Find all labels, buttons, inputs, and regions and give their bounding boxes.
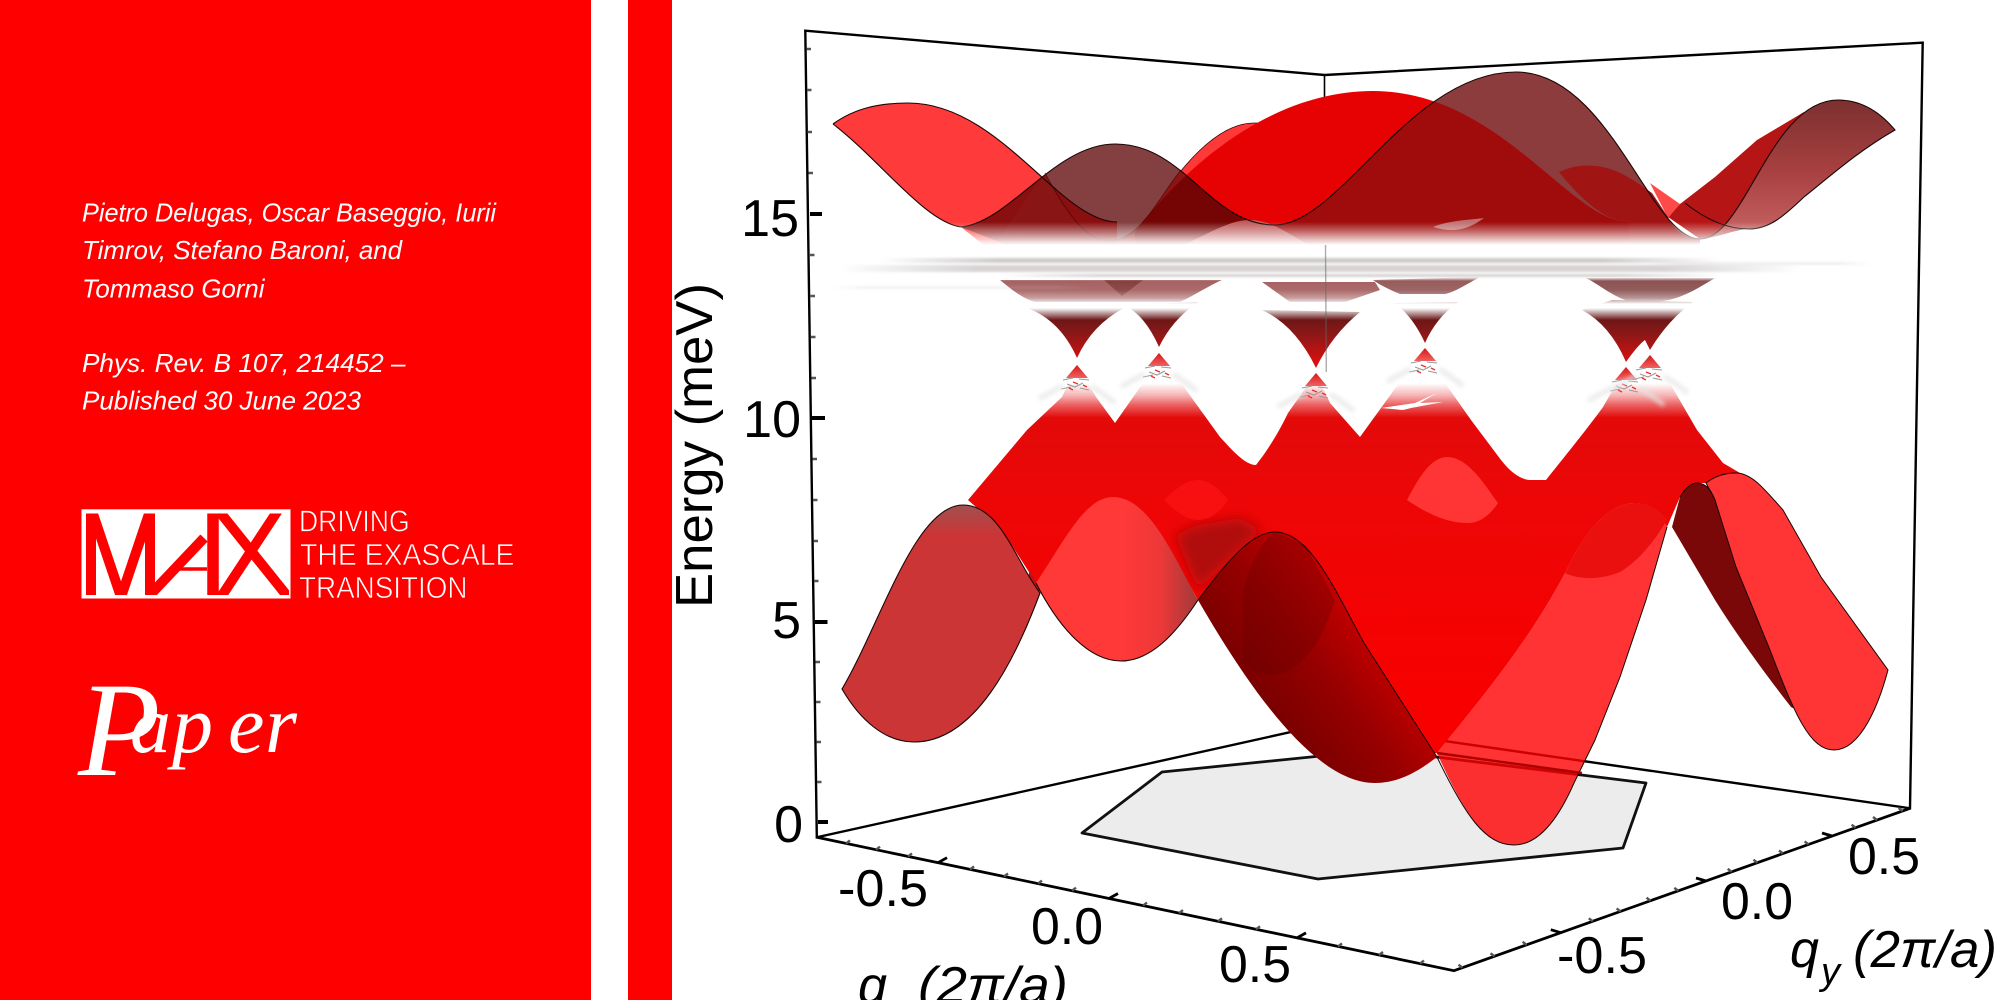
qy axis title: q [1790, 921, 1819, 979]
qy tick labels: 0.5 [1848, 828, 1920, 886]
text block: journal reference: Published 30 June 2023 [82, 386, 362, 416]
right arm dark fold [1672, 483, 1800, 712]
qy tick labels [1557, 828, 1920, 985]
qx tick labels [838, 860, 1291, 994]
y axis labels: 0 [774, 796, 803, 854]
qx tick labels: 0.0 [1031, 898, 1103, 956]
qy axis title: (2π/a) [1853, 921, 1997, 979]
qx axis ticks [846, 840, 1424, 964]
floor: Brillouin zone hexagon [1082, 750, 1646, 879]
main red body of lower band [968, 348, 1740, 760]
shaded fold [1175, 518, 1262, 590]
logo: MAX [82, 509, 290, 598]
text block: authors: Tommaso Gorni [82, 274, 266, 304]
front axes [817, 808, 1910, 971]
thin floor line seen through front sheet [1437, 753, 1582, 773]
chart: 3D magnon band structure [666, 31, 1997, 1000]
qy axis ticks [1458, 808, 1903, 968]
dark central lobe [1198, 532, 1437, 783]
white fade overlay between bands [830, 215, 1890, 325]
cone apex marks on lower band [1039, 348, 1688, 411]
y axis labels: 10 [743, 391, 801, 449]
lower magnon band surface [842, 348, 1888, 845]
mid-gap sheets [1000, 277, 1715, 302]
gray flat-band streaks [830, 258, 1870, 289]
text block: authors: Timrov, Stefano Baroni, and [82, 235, 404, 265]
qy tick labels: 0.0 [1721, 873, 1793, 931]
left brown lobe [842, 505, 1040, 742]
logo tagline: DRIVING [299, 504, 410, 539]
logo tagline: THE EXASCALE [300, 537, 514, 572]
lower band fade overlay [830, 345, 1890, 420]
interior lobes [1164, 457, 1498, 523]
y axis labels [741, 190, 803, 854]
lower band outlines [1198, 483, 1715, 845]
white glitch shards on lower band [1381, 393, 1443, 410]
logo tagline: TRANSITION [299, 570, 468, 605]
qx tick labels: -0.5 [838, 860, 928, 918]
text block: journal reference [82, 348, 406, 416]
right arm bright sheet [1706, 473, 1888, 750]
qx tick labels: 0.5 [1219, 936, 1291, 994]
energy axis ticks [806, 49, 828, 822]
qy tick labels: -0.5 [1557, 927, 1647, 985]
y axis labels: 15 [741, 190, 799, 248]
y axis labels: 5 [772, 592, 801, 650]
heading: Paper script: aper [130, 679, 298, 770]
logo tagline [299, 504, 514, 605]
qy axis title: y [1818, 951, 1842, 993]
decorative red strip [628, 0, 672, 1000]
upper magnon band surface [833, 72, 1895, 250]
back corner line through gap [1324, 245, 1327, 372]
Dirac cones, upper side [1027, 300, 1693, 368]
heading: Paper script: P [78, 656, 160, 805]
panel: left red sidebar [0, 0, 591, 1000]
chart back walls and floor frame [805, 31, 1923, 837]
text block: authors [82, 198, 497, 304]
y axis title: Energy (meV) [666, 283, 724, 608]
front bright sheet [1437, 503, 1667, 845]
bright dip [1036, 497, 1198, 661]
text block: authors: Pietro Delugas, Oscar Baseggio, Iurii [82, 198, 497, 228]
text block: journal reference: Phys. Rev. B 107, 214452 – [82, 348, 406, 378]
